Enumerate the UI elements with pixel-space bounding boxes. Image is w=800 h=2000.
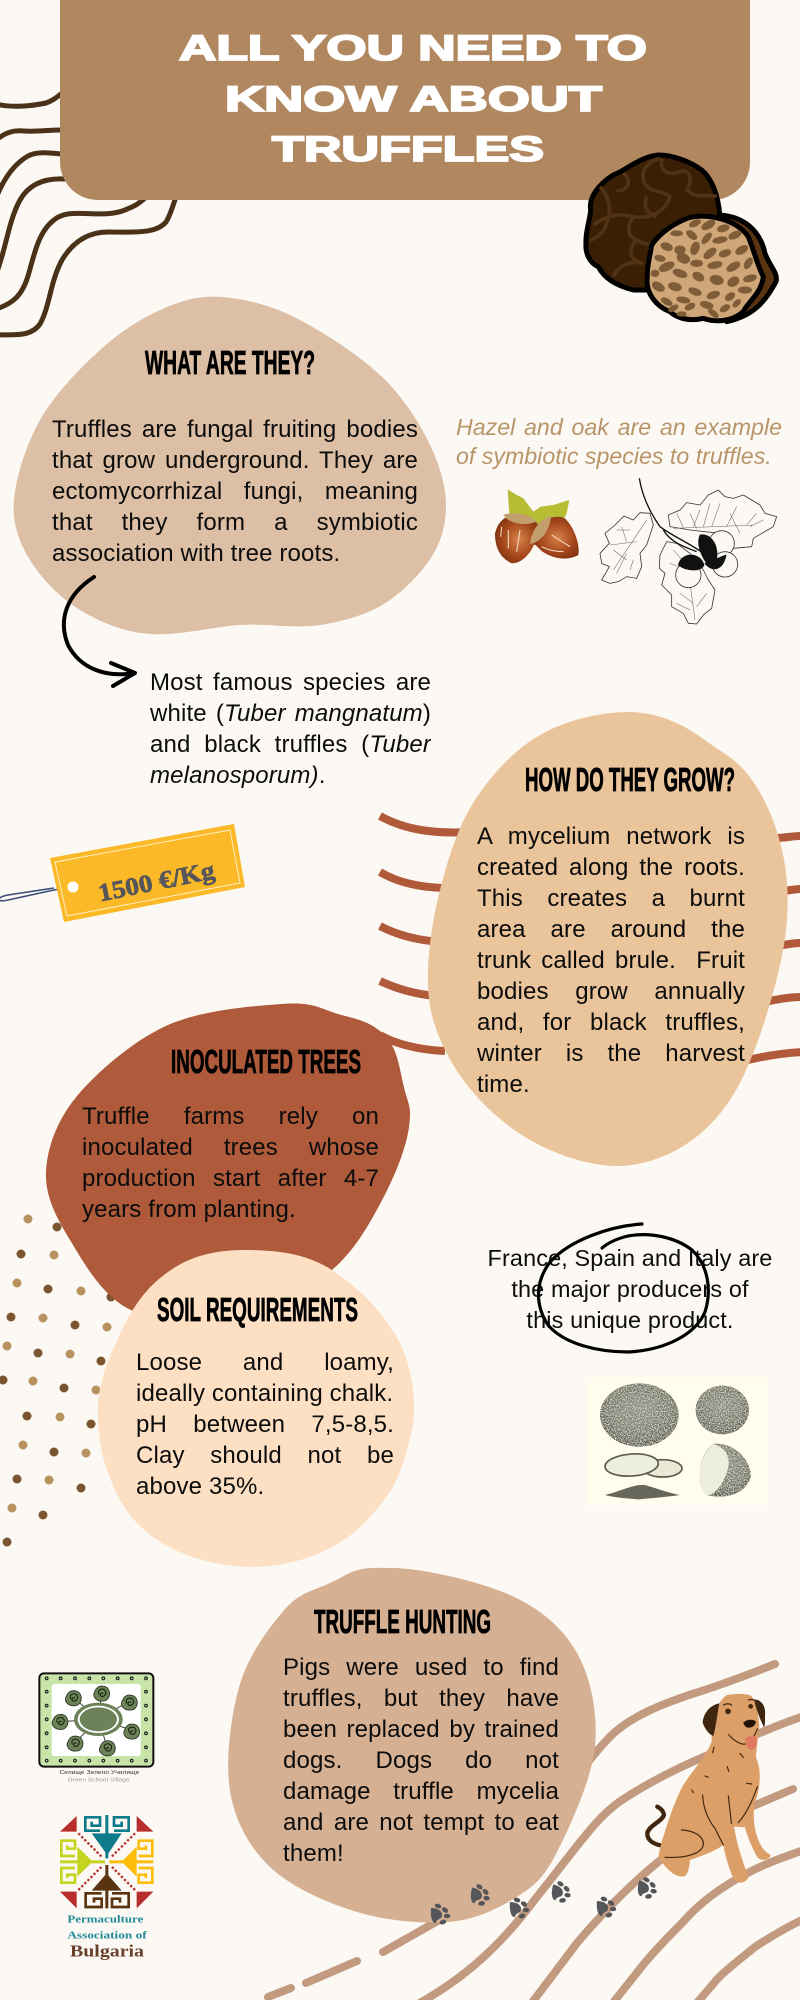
title: TRUFFLES bbox=[272, 130, 544, 169]
text: soil requirements: Loose and loamy, bbox=[136, 1349, 394, 1376]
text: soil requirements bbox=[136, 1347, 394, 1507]
title: ALL YOU NEED TO bbox=[179, 29, 647, 68]
text: what are they bbox=[52, 414, 418, 574]
panel: inoculated trees bbox=[46, 1003, 410, 1324]
logo: green school village bbox=[39, 1673, 153, 1783]
text: what are they: Truffles are fungal fruiting bodies bbox=[52, 416, 418, 443]
text: how do they grow: A mycelium network is bbox=[477, 823, 745, 850]
text: major producers: France, Spain and Italy are bbox=[488, 1245, 772, 1271]
panel: soil requirements bbox=[98, 1250, 414, 1567]
text: inoculated trees: production start after 4-7 bbox=[82, 1165, 379, 1192]
text: soil requirements: pH between 7,5-8,5. bbox=[136, 1411, 394, 1438]
dog trail lines bbox=[268, 1664, 800, 2000]
text: inoculated trees: years from planting. bbox=[82, 1196, 296, 1223]
text: how do they grow: bodies grow annually bbox=[477, 978, 745, 1005]
text: how do they grow: created along the roots. bbox=[477, 854, 745, 881]
text: inoculated trees: Truffle farms rely on bbox=[82, 1103, 379, 1130]
header banner bbox=[60, 0, 750, 200]
text: inoculated trees bbox=[82, 1101, 379, 1231]
text: hazel and oak note: of symbiotic species to truffles. bbox=[456, 443, 772, 469]
price tag bbox=[0, 824, 245, 922]
text: most famous species: white (Tuber mangnatum) bbox=[150, 700, 431, 727]
logo: green school village: Green School Village bbox=[68, 1777, 130, 1783]
text: truffle hunting: been replaced by trained bbox=[283, 1716, 559, 1743]
text: truffle hunting: dogs. Dogs do not bbox=[283, 1747, 559, 1774]
text: truffle hunting: and are not tempt to eat bbox=[283, 1809, 559, 1836]
text: how do they grow: winter is the harvest bbox=[477, 1040, 745, 1067]
text: truffle hunting: truffles, but they have bbox=[283, 1685, 559, 1712]
logo: permaculture association of bulgaria bbox=[60, 1815, 153, 1961]
logo: permaculture association of bulgaria: Association of bbox=[67, 1931, 148, 1942]
text: major producers: this unique product. bbox=[526, 1307, 734, 1333]
text: most famous species: Most famous species are bbox=[150, 669, 431, 696]
panel: truffle hunting bbox=[228, 1568, 596, 1923]
text: most famous species: melanosporum). bbox=[150, 762, 326, 789]
title: KNOW ABOUT bbox=[225, 80, 602, 119]
text: what are they: that grow underground. They are bbox=[52, 447, 418, 474]
text: truffle hunting: them! bbox=[283, 1840, 344, 1867]
illustration: engraving of truffles bbox=[586, 1377, 767, 1505]
panel: how do they grow bbox=[380, 712, 800, 1166]
dog tail bbox=[647, 1807, 665, 1846]
heading: soil requirements: SOIL REQUIREMENTS bbox=[157, 1291, 358, 1328]
logo: green school village: Селище Зелено Училище bbox=[59, 1770, 139, 1776]
decoration: dotted pattern bbox=[0, 1214, 116, 1546]
illustration: dog bbox=[647, 1694, 771, 1883]
text: how do they grow bbox=[477, 821, 745, 1106]
text: truffle hunting: Pigs were used to find bbox=[283, 1654, 559, 1681]
text: truffle hunting bbox=[283, 1652, 559, 1877]
price label: 1500 €/Kg bbox=[96, 857, 218, 907]
logo: permaculture association of bulgaria: Permaculture bbox=[67, 1915, 144, 1926]
root lines bbox=[380, 816, 800, 1060]
text: how do they grow: time. bbox=[477, 1071, 530, 1098]
illustration: truffles bbox=[586, 155, 776, 322]
tag string bbox=[0, 887, 73, 901]
text: major producers bbox=[470, 1243, 790, 1343]
illustration: oak branch and acorns bbox=[600, 478, 777, 624]
heading: what are they: WHAT ARE THEY? bbox=[145, 344, 315, 381]
text: how do they grow: and, for black truffles, bbox=[477, 1009, 745, 1036]
text: most famous species bbox=[150, 667, 431, 797]
text: major producers: the major producers of bbox=[511, 1276, 749, 1302]
decoration: wavy brown lines top left bbox=[0, 93, 176, 335]
logo: permaculture association of bulgaria: Bulgaria bbox=[70, 1942, 145, 1961]
text: what are they: ectomycorrhizal fungi, meaning bbox=[52, 478, 418, 505]
text: soil requirements: ideally containing chalk. bbox=[136, 1380, 393, 1407]
text: soil requirements: Clay should not be bbox=[136, 1442, 394, 1469]
title bbox=[179, 29, 647, 169]
text: soil requirements: above 35%. bbox=[136, 1473, 264, 1500]
text: hazel and oak note bbox=[456, 413, 782, 475]
text: what are they: that they form a symbiotic bbox=[52, 509, 418, 536]
arrow: to most famous species bbox=[64, 577, 135, 686]
text: hazel and oak note: Hazel and oak are an example bbox=[456, 414, 782, 440]
paw prints bbox=[431, 1875, 659, 1925]
illustration: hazelnuts bbox=[495, 489, 579, 563]
text: how do they grow: This creates a burnt bbox=[477, 885, 745, 912]
text: how do they grow: trunk called brule. Fruit bbox=[477, 947, 745, 974]
text: truffle hunting: damage truffle mycelia bbox=[283, 1778, 559, 1805]
text: how do they grow: area are around the bbox=[477, 916, 745, 943]
heading: truffle hunting: TRUFFLE HUNTING bbox=[314, 1603, 491, 1640]
text: most famous species: and black truffles (Tuber bbox=[150, 731, 431, 758]
heading: inoculated trees: INOCULATED TREES bbox=[171, 1043, 361, 1080]
panel: what are they bbox=[14, 297, 446, 634]
scribble circle bbox=[538, 1224, 708, 1352]
text: inoculated trees: inoculated trees whose bbox=[82, 1134, 379, 1161]
text: what are they: association with tree roots. bbox=[52, 540, 340, 567]
